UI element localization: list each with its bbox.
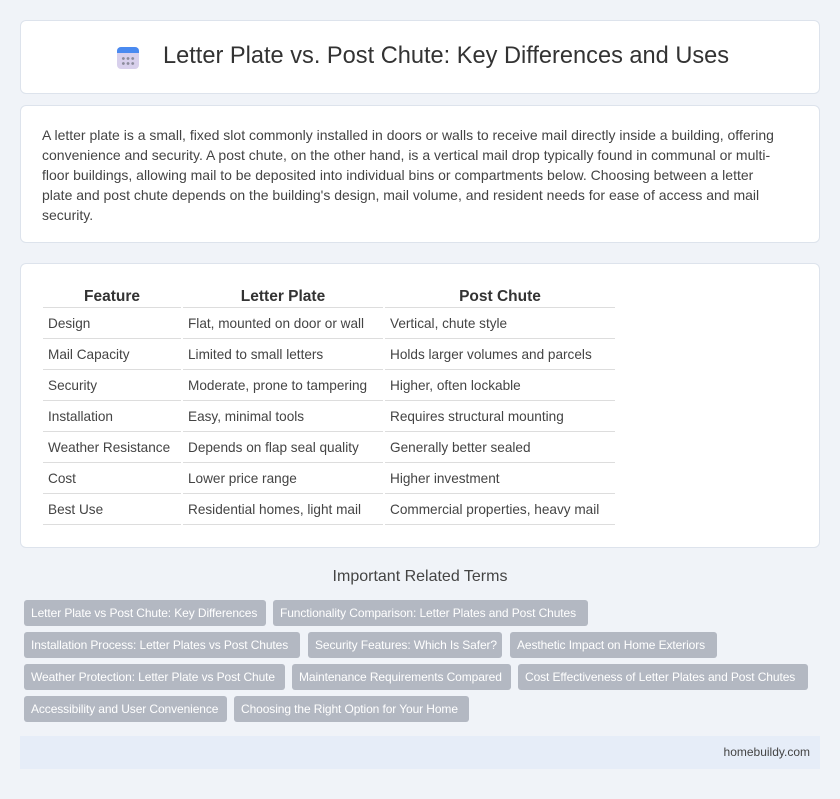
related tags: Functionality Comparison: Letter Plates and Post Chutes (280, 606, 576, 620)
comparison table: Feature (84, 288, 140, 304)
comparison table: Mail Capacity (48, 346, 130, 362)
comparison table: Weather Resistance (48, 440, 170, 454)
related tags: Weather Protection: Letter Plate vs Post Chute (31, 670, 275, 684)
comparison table: Higher investment (390, 470, 500, 486)
comparison table: Lower price range (188, 470, 297, 486)
comparison table: Commercial properties, heavy mail (390, 502, 599, 516)
comparison table: Post Chute (459, 288, 541, 304)
related tags: Security Features: Which Is Safer? (315, 638, 497, 652)
comparison table: Depends on flap seal quality (188, 440, 359, 454)
footer (20, 736, 820, 769)
comparison table: Cost (48, 470, 76, 486)
comparison table: Moderate, prone to tampering (188, 378, 367, 392)
related tags: Installation Process: Letter Plates vs Post Chutes (31, 638, 288, 652)
header card (20, 20, 820, 94)
comparison table: Letter Plate (241, 288, 325, 304)
comparison table: Installation (48, 408, 113, 424)
comparison table: Best Use (48, 502, 103, 516)
intro text: floor buildings, allowing mail to be deposited into individual bins or compartments below. Choosing between a letter (42, 167, 753, 183)
related tags: Choosing the Right Option for Your Home (241, 702, 458, 716)
related tags: Aesthetic Impact on Home Exteriors (517, 638, 705, 652)
comparison table: Limited to small letters (188, 346, 323, 362)
title: Letter Plate vs. Post Chute: Key Differences and Uses (163, 43, 729, 69)
footer: homebuildy.com (724, 745, 810, 759)
comparison table: Flat, mounted on door or wall (188, 316, 364, 330)
intro text (20, 105, 820, 243)
comparison table: Security (48, 378, 97, 392)
related tags: Cost Effectiveness of Letter Plates and Post Chutes (525, 670, 795, 684)
comparison table: Requires structural mounting (390, 408, 564, 424)
icon: calendar (117, 47, 139, 69)
comparison table: Higher, often lockable (390, 378, 521, 392)
intro text: security. (42, 207, 93, 223)
comparison table: Design (48, 316, 90, 330)
comparison table: Generally better sealed (390, 440, 531, 454)
comparison table: Residential homes, light mail (188, 502, 361, 516)
comparison table: Easy, minimal tools (188, 408, 304, 424)
comparison table (20, 263, 820, 548)
related terms heading: Important Related Terms (333, 568, 507, 585)
comparison table: Vertical, chute style (390, 316, 507, 330)
related tags: Letter Plate vs Post Chute: Key Differences (31, 606, 257, 620)
related tags: Maintenance Requirements Compared (299, 670, 502, 684)
comparison table: Holds larger volumes and parcels (390, 346, 592, 362)
related tags: Accessibility and User Convenience (31, 702, 218, 716)
intro text: convenience and security. A post chute, on the other hand, is a vertical mail drop typically found in communal or multi- (42, 147, 770, 163)
intro text: plate and post chute depends on the building's design, mail volume, and resident needs for ease of access and mail (42, 187, 759, 203)
intro text: A letter plate is a small, fixed slot commonly installed in doors or walls to receive mail directly inside a building, offering (42, 127, 774, 143)
